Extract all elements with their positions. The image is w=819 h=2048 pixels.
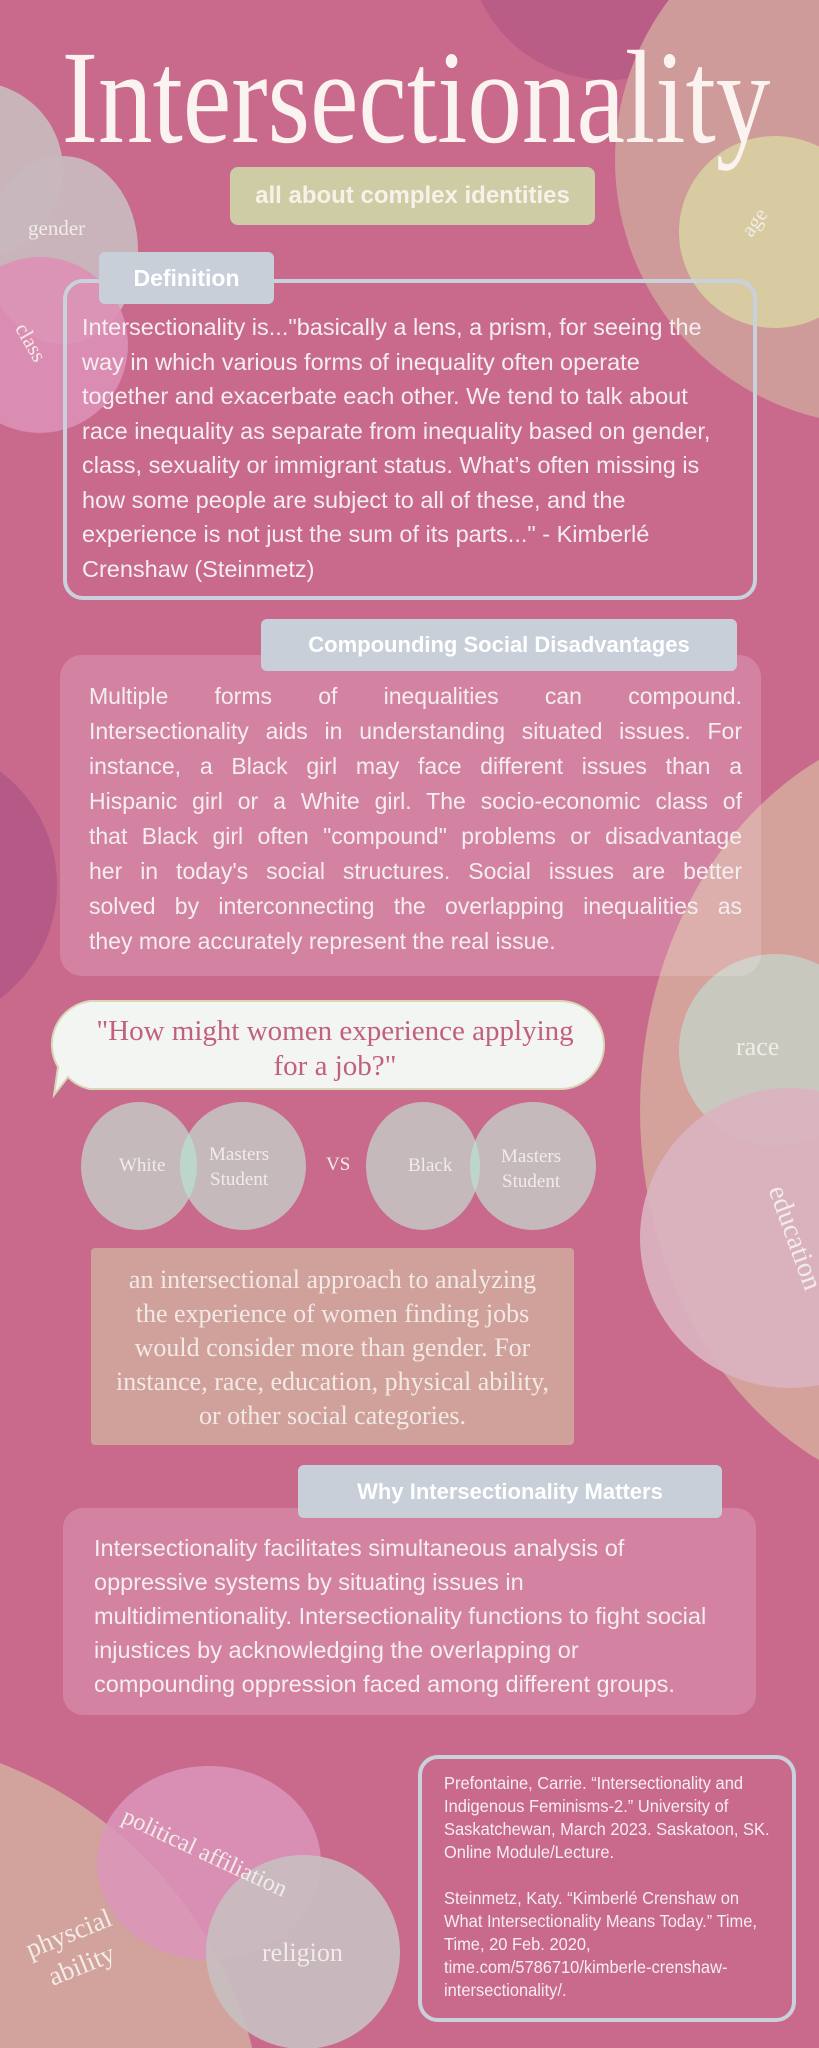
why text: compounding oppression faced among different groups. [94, 1671, 675, 1697]
panel: compounding social disadvantages [60, 655, 761, 976]
definition text: race inequality as separate from inequality based on gender, [82, 418, 710, 444]
heading: compounding social disadvantages [261, 619, 737, 671]
compounding text: they more accurately represent the real issue. [89, 928, 556, 954]
why text: injustices by acknowledging the overlapping or [94, 1637, 579, 1663]
compounding text: solved by interconnecting the overlapping inequalities as [89, 893, 742, 919]
heading: why intersectionality matters: Why Intersectionality Matters [357, 1479, 663, 1504]
panel: references: Steinmetz, Katy. “Kimberlé Crenshaw on [444, 1888, 739, 1908]
bubble text: for a job?" [274, 1050, 396, 1082]
venn: black + masters student [366, 1102, 596, 1230]
subtitle pill: all about complex identities [255, 182, 570, 209]
compounding text [89, 683, 742, 954]
panel: references: time.com/5786710/kimberle-crenshaw- [444, 1957, 727, 1977]
callout: intersectional approach: instance, race, education, physical ability, [116, 1367, 549, 1396]
definition text: Crenshaw (Steinmetz) [82, 556, 314, 582]
compounding text: Intersectionality aids in understanding situated issues. For [89, 718, 742, 744]
compounding text: Multiple forms of inequalities can compound. [89, 683, 742, 709]
label: physical ability: physcial [21, 1902, 116, 1964]
label: age: age [736, 203, 772, 241]
why text: multidimentionality. Intersectionality functions to fight social [94, 1603, 706, 1629]
label: class: class [10, 319, 51, 366]
heading: definition [99, 252, 274, 304]
label: political affiliation: political affiliation [118, 1803, 291, 1903]
panel: definition [63, 279, 757, 600]
panel: references: Indigenous Feminisms-2.” University of [444, 1796, 728, 1816]
callout: intersectional approach [91, 1248, 574, 1445]
panel: references: Prefontaine, Carrie. “Intersectionality and [444, 1773, 743, 1793]
why text: oppressive systems by situating issues in [94, 1569, 524, 1595]
compounding text: that Black girl often "compound" problems or disadvantage [89, 823, 742, 849]
speech bubble [50, 1000, 605, 1098]
venn: white + masters student: White [119, 1155, 165, 1176]
label: religion: religion [262, 1938, 343, 1967]
callout: intersectional approach: or other social categories. [199, 1401, 466, 1430]
panel: references: intersectionality/. [444, 1980, 567, 2000]
vs label: VS [326, 1154, 350, 1175]
venn: white + masters student: Masters [209, 1144, 269, 1165]
callout: intersectional approach: the experience of women finding jobs [136, 1299, 529, 1328]
label: race: race [736, 1032, 779, 1061]
compounding text: Hispanic girl or a White girl. The socio-economic class of [89, 788, 742, 814]
panel: references [418, 1755, 796, 2022]
venn: white + masters student [81, 1102, 306, 1230]
definition text: Intersectionality is..."basically a lens, a prism, for seeing the [82, 314, 702, 340]
panel: references: Saskatchewan, March 2023. Saskatoon, SK. [444, 1819, 770, 1839]
panel: references: Time, 20 Feb. 2020, [444, 1934, 591, 1954]
why text [94, 1535, 706, 1697]
venn: black + masters student: Masters [501, 1146, 561, 1167]
definition text: together and exacerbate each other. We tend to talk about [82, 383, 688, 409]
label: physical ability [21, 1902, 119, 1992]
callout: intersectional approach: an intersectional approach to analyzing [129, 1265, 536, 1294]
definition text: how some people are subject to all of these, and the [82, 486, 625, 512]
bubble text [96, 1015, 574, 1082]
label: gender: gender [28, 216, 85, 240]
venn: black + masters student: Black [408, 1155, 452, 1176]
bubble text: "How might women experience applying [96, 1015, 574, 1047]
panel: why intersectionality matters [63, 1508, 756, 1715]
subtitle pill [230, 167, 595, 225]
definition text: way in which various forms of inequality often operate [82, 348, 640, 374]
venn: white + masters student: Student [210, 1169, 268, 1190]
panel: references: Online Module/Lecture. [444, 1842, 614, 1862]
label: physical ability: ability [44, 1938, 119, 1992]
heading: definition: Definition [133, 265, 240, 291]
compounding text: instance, a Black girl may face different issues than a [89, 753, 742, 779]
venn: black + masters student: Student [502, 1171, 560, 1192]
why text: Intersectionality facilitates simultaneous analysis of [94, 1535, 624, 1561]
heading: compounding social disadvantages: Compounding Social Disadvantages [308, 632, 690, 657]
panel: references: What Intersectionality Means Today.” Time, [444, 1911, 757, 1931]
definition text: class, sexuality or immigrant status. What’s often missing is [82, 452, 699, 478]
definition text [82, 314, 710, 582]
definition text: experience is not just the sum of its parts..." - Kimberlé [82, 521, 649, 547]
compounding text: her in today's social structures. Social issues are better [89, 858, 742, 884]
heading: why intersectionality matters [298, 1465, 722, 1518]
title: Intersectionality [62, 23, 770, 171]
callout: intersectional approach: would consider more than gender. For [135, 1333, 530, 1362]
